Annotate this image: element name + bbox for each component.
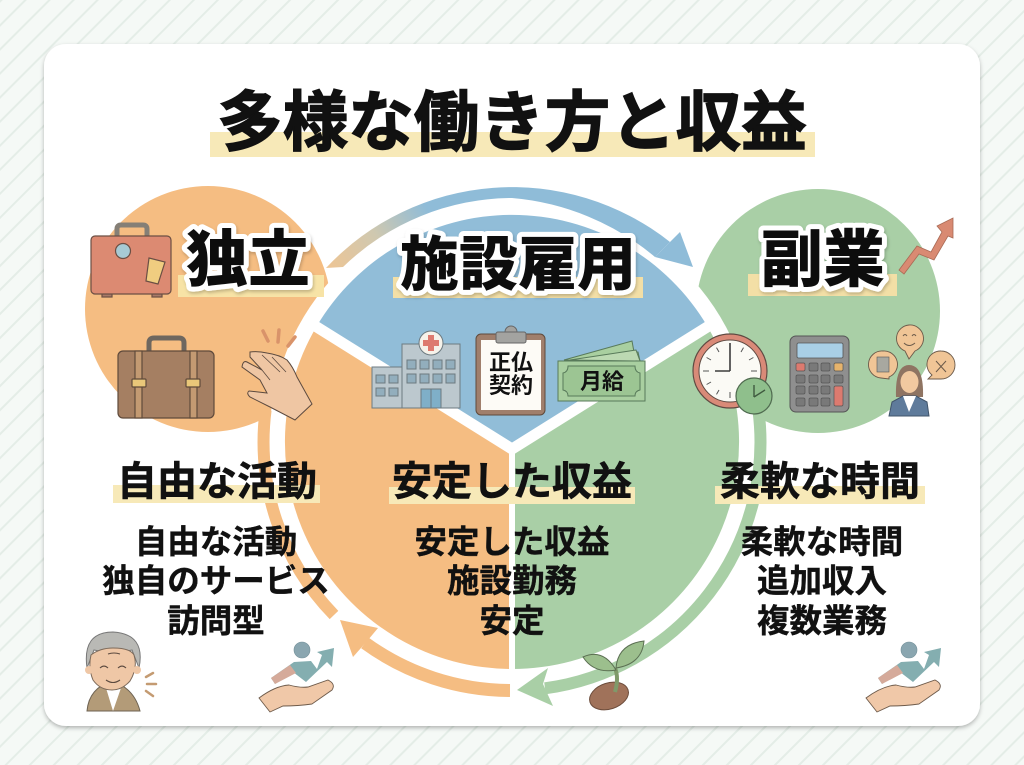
text block: independent details: 自由な活動 xyxy=(135,524,297,560)
sector: employment xyxy=(316,215,708,449)
arrow: green cycle arc xyxy=(517,410,760,706)
icon: brown briefcase xyxy=(118,338,214,418)
label highlight: side job xyxy=(748,274,897,296)
icon: rising arrow xyxy=(899,218,953,274)
label: independent: 独立 xyxy=(186,226,310,295)
text block: side job details: 追加収入 xyxy=(757,563,887,599)
circle: independent xyxy=(85,186,331,432)
icon: calculator xyxy=(790,336,849,412)
icon: hospital xyxy=(372,331,460,408)
icon: monthly pay banknotes: 月給 xyxy=(580,369,624,394)
text block: side job details: 柔軟な時間 xyxy=(741,524,903,560)
text block: employment details xyxy=(414,524,610,639)
icon: red suitcase xyxy=(91,225,171,297)
subheading: flexible time: 柔軟な時間 xyxy=(720,460,920,504)
text block: side job details: 複数業務 xyxy=(757,603,887,639)
icon: wall clock xyxy=(693,334,772,414)
icon: hand with growth (left) xyxy=(259,642,334,712)
title highlight xyxy=(210,132,815,157)
icon: contract clipboard xyxy=(476,326,545,415)
icon: sprout xyxy=(583,641,644,715)
icon: smiling grandmother xyxy=(85,632,156,711)
arrow: blue cycle arc xyxy=(326,187,693,268)
icon: monthly pay banknotes xyxy=(558,341,645,401)
white ring disc xyxy=(269,199,755,685)
icon: contract clipboard: 正仏 xyxy=(489,350,533,375)
label highlight: independent xyxy=(178,275,324,297)
icon: hand with growth (right) xyxy=(866,642,941,712)
text block: employment details: 安定した収益 xyxy=(414,524,610,560)
text block: employment details: 安定 xyxy=(479,603,545,639)
label highlight: employment xyxy=(393,277,643,298)
text block: independent details: 独自のサービス xyxy=(102,563,330,599)
subheading highlight: center xyxy=(389,487,635,504)
icon: woman with speech bubbles xyxy=(868,325,955,416)
text block: employment details: 施設勤務 xyxy=(447,563,577,599)
label: side job: 副業 xyxy=(761,226,885,295)
text block: independent details: 訪問型 xyxy=(167,603,265,639)
icon: contract clipboard: 契約 xyxy=(489,373,533,398)
subheading: stable income: 安定した収益 xyxy=(392,460,632,504)
icon: waving hand xyxy=(242,330,312,420)
circle: side job xyxy=(696,189,940,433)
text block: independent details xyxy=(102,524,330,639)
label: facility employment: 施設雇用 xyxy=(400,232,636,298)
subheading highlight: left xyxy=(113,485,320,503)
text block: side job details xyxy=(741,524,903,639)
subheading: free activity: 自由な活動 xyxy=(117,460,317,504)
subheading highlight: right xyxy=(715,486,925,504)
title: 多様な働き方と収益 xyxy=(217,86,807,159)
sector: independent xyxy=(285,327,512,669)
arrow: orange cycle arc xyxy=(264,410,510,690)
sector: side job xyxy=(512,327,739,669)
